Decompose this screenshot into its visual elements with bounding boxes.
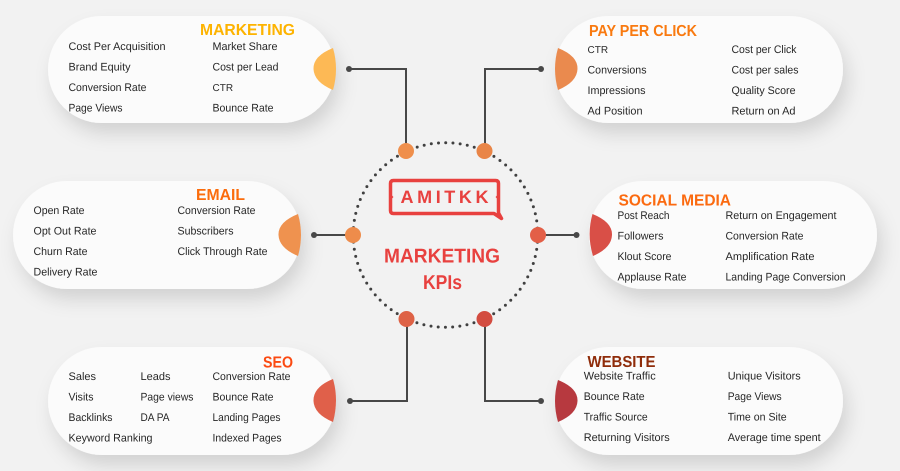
website KPI list: Returning Visitors [584,432,670,444]
marketing KPI list: CTR [212,83,233,94]
marketing pill [48,16,335,123]
icon: social media lens [590,214,612,256]
panel: marketing [48,16,336,123]
email KPI list: Opt Out Rate [34,226,96,238]
logo: AMITKK speech bubble: AMITKK [400,187,488,207]
panel: social media [589,181,877,289]
pay per click KPI list [588,44,799,118]
marketing KPI list: Cost Per Acquisition [68,41,166,53]
email KPI list: Churn Rate [34,246,88,258]
email KPI list: Open Rate [34,205,84,217]
heading: pay per click: PAY PER CLICK [589,23,697,40]
heading: seo: SEO [263,354,293,372]
email KPI list [34,205,268,278]
marketing KPI list: Cost per Lead [212,62,278,74]
seo KPI list: Backlinks [68,412,113,424]
heading: marketing: MARKETING [200,22,295,39]
email KPI list: Conversion Rate [178,205,256,217]
heading: social media: SOCIAL MEDIA [618,192,731,210]
panel: seo [48,347,336,455]
dotted central ring [353,143,538,327]
icon: pay per click lens [555,48,578,90]
pay per click KPI list: Cost per sales [732,64,799,76]
logo: AMITKK speech bubble [390,180,502,218]
pay per click KPI list: Cost per Click [732,44,797,56]
panel: website [555,347,843,455]
marketing KPI list: Brand Equity [68,62,131,74]
seo KPI list: Landing Pages [212,412,281,424]
seo pill [48,347,336,455]
seo KPI list: Page views [140,392,194,404]
pay per click KPI list: Return on Ad [732,106,796,118]
social media KPI list: Followers [618,230,664,242]
pay per click KPI list: Ad Position [588,106,642,118]
website KPI list: Traffic Source [584,412,648,424]
center title: KPIs [423,272,462,294]
website KPI list: Website Traffic [584,370,656,382]
website pill [555,347,843,455]
seo KPI list: Indexed Pages [212,432,282,444]
website KPI list: Bounce Rate [584,391,645,403]
email KPI list: Subscribers [178,226,234,238]
heading: website: WEBSITE [588,354,656,371]
seo KPI list: DA PA [140,412,170,424]
social media KPI list: Amplification Rate [726,251,814,263]
social media KPI list [618,210,846,284]
heading: email: EMAIL [196,187,245,204]
social media KPI list: Conversion Rate [726,230,804,242]
seo KPI list: Visits [68,392,94,404]
social media pill [589,181,877,289]
website KPI list: Unique Visitors [728,370,801,382]
marketing KPI list: Bounce Rate [212,102,274,114]
social media KPI list: Klout Score [618,251,672,263]
center title: MARKETING [384,246,500,268]
website KPI list [584,370,821,444]
email KPI list: Delivery Rate [34,266,98,278]
pay per click pill [555,16,843,123]
pay per click KPI list: Conversions [588,64,647,76]
seo KPI list: Conversion Rate [212,371,290,383]
marketing KPI list: Page Views [68,102,123,114]
website KPI list: Page Views [728,391,782,403]
social media KPI list: Return on Engagement [726,210,836,222]
panel: pay per click [555,16,843,123]
icon: email lens [278,214,301,256]
icon: marketing lens [313,48,336,90]
panel: email [13,181,301,289]
pay per click KPI list: CTR [588,45,608,56]
pay per click KPI list: Quality Score [732,85,796,97]
seo KPI list: Leads [140,371,171,383]
icon: website lens [555,380,578,422]
marketing KPI list: Market Share [212,41,278,53]
seo KPI list [68,371,290,444]
center title [384,246,500,294]
seo KPI list: Sales [68,371,97,383]
connector arrows [311,66,580,404]
email pill [13,181,301,289]
ring nodes [345,143,546,327]
seo KPI list: Keyword Ranking [68,432,152,444]
seo KPI list: Bounce Rate [212,392,274,404]
social media KPI list: Applause Rate [618,272,686,284]
pay per click KPI list: Impressions [588,85,646,97]
marketing KPI list [68,41,278,114]
email KPI list: Click Through Rate [178,246,268,258]
marketing KPI list: Conversion Rate [68,82,146,94]
website KPI list: Time on Site [728,412,787,424]
website KPI list: Average time spent [728,432,821,444]
social media KPI list: Landing Page Conversion [726,272,846,284]
icon: seo lens [313,379,336,422]
social media KPI list: Post Reach [618,210,670,222]
